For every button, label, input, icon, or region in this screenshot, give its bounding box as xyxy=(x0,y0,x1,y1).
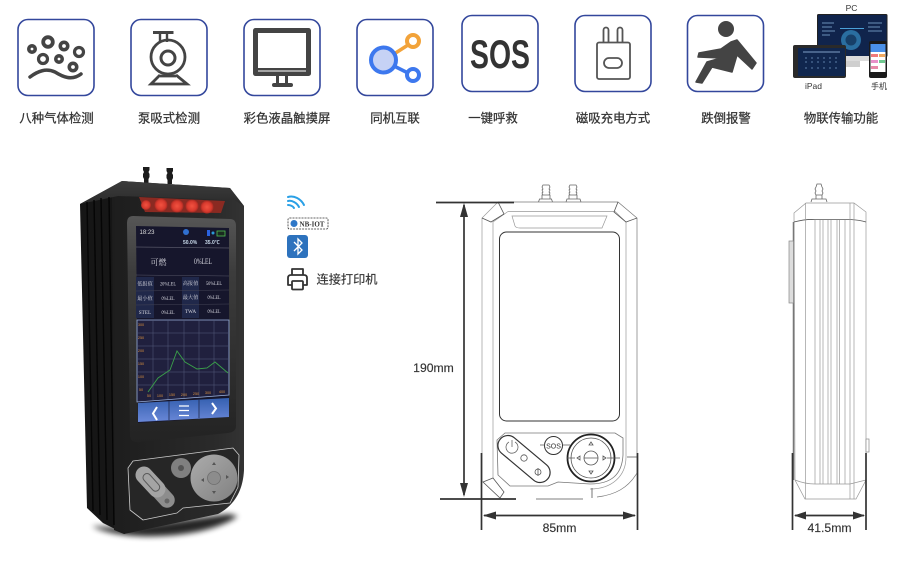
nozzles xyxy=(538,185,581,202)
parameter table xyxy=(136,277,229,318)
height dimension: 190mm xyxy=(413,361,454,375)
label: 磁吸充电方式 xyxy=(576,110,650,126)
depth dimension xyxy=(792,453,866,535)
side view drawing xyxy=(789,184,869,499)
label: 跌倒报警 xyxy=(701,110,751,126)
outline xyxy=(794,203,866,499)
direction pad xyxy=(568,434,614,482)
line chart: 50 xyxy=(139,388,143,392)
parameter table: 0%LEL xyxy=(208,295,220,301)
parameter table: 50%LEL xyxy=(206,281,222,287)
screen content: 35.0℃ xyxy=(205,240,220,246)
gas nozzles xyxy=(143,167,173,184)
red LED bar xyxy=(139,197,225,214)
label: 泵吸式检测 xyxy=(138,110,200,126)
parameter table: TWA xyxy=(185,309,196,315)
connectivity list xyxy=(287,196,377,290)
ribs xyxy=(806,203,854,499)
width dimension: 85mm xyxy=(543,521,576,535)
feature: fall alarm xyxy=(688,16,764,126)
line chart xyxy=(137,320,229,402)
printer label: 连接打印机 xyxy=(317,272,377,286)
icon: SOS: SOS xyxy=(470,33,530,77)
line chart: 100 xyxy=(138,375,144,379)
label: 物联传输功能 xyxy=(804,110,878,126)
height dimension xyxy=(413,202,516,499)
ground shadow xyxy=(92,514,238,536)
control panel xyxy=(128,448,239,520)
parameter table: 最小值 xyxy=(137,294,154,302)
front view drawing xyxy=(482,185,637,499)
depth dimension: 41.5mm xyxy=(807,521,852,535)
SOS button xyxy=(171,458,191,478)
icon: PC iPad phone: 手机 xyxy=(871,81,887,91)
parameter table: STEL xyxy=(139,310,151,316)
feature: colour touch screen xyxy=(244,20,330,126)
label: 八种气体检测 xyxy=(19,110,94,126)
parameter table: 0%LEL xyxy=(208,309,220,315)
icon: share nodes xyxy=(371,35,419,81)
label: 彩色液晶触摸屏 xyxy=(244,110,330,126)
LED window xyxy=(512,216,607,228)
parameter table: 最大值 xyxy=(183,293,199,301)
SOS key xyxy=(544,436,562,454)
status bar: 18:23 xyxy=(139,230,155,236)
ribbed side xyxy=(80,181,126,534)
feature: magnetic charging xyxy=(575,16,651,126)
line chart: 200 xyxy=(181,393,187,397)
top chamfer xyxy=(80,181,244,206)
parameter table: 高报值 xyxy=(183,279,199,287)
line chart: 150 xyxy=(169,393,175,397)
icon: printer xyxy=(288,269,307,290)
icon: pump xyxy=(151,32,187,84)
line chart: 250 xyxy=(193,392,199,396)
screen bezel xyxy=(127,216,236,442)
line chart: 300 xyxy=(138,323,144,327)
device photo xyxy=(80,167,244,536)
line chart: 150 xyxy=(138,362,144,366)
screen content: 50.0% xyxy=(183,240,198,246)
front view drawing: SOS xyxy=(546,444,561,450)
icon: wifi xyxy=(288,196,304,208)
parameter table: 0%LEL xyxy=(162,296,174,302)
label: 一键呼救 xyxy=(468,110,518,126)
parameter table: 低报值 xyxy=(137,280,154,288)
left edge and side button xyxy=(792,222,794,480)
control panel outline xyxy=(497,433,623,486)
icon: monitor xyxy=(253,28,311,87)
direction pad xyxy=(190,454,238,502)
nozzle xyxy=(811,184,827,202)
icon: falling person xyxy=(696,21,756,83)
bottom details xyxy=(483,457,637,499)
icon: PC iPad phone xyxy=(793,3,887,91)
icon: PC iPad phone: PC xyxy=(846,3,857,13)
main reading: 可燃 xyxy=(150,257,167,267)
width dimension xyxy=(482,453,638,535)
label: 同机互联 xyxy=(370,112,420,126)
icon: NB-IoT badge: NB-IOT xyxy=(300,220,325,228)
power slider button xyxy=(145,476,167,500)
power slider xyxy=(494,431,554,487)
line chart: 250 xyxy=(138,336,144,340)
parameter table: 20%LEL xyxy=(160,282,176,288)
line chart: 100 xyxy=(157,394,163,398)
line chart: 300 xyxy=(205,391,211,395)
line chart: 400 xyxy=(219,390,225,394)
side ribs xyxy=(87,197,114,525)
feature: one-key SOS xyxy=(462,16,538,126)
screen content: 0%LEL xyxy=(194,257,212,266)
icon: PC iPad phone: iPad xyxy=(805,81,822,91)
line chart: 50 xyxy=(147,394,151,398)
feature: pump detection xyxy=(131,20,207,126)
nav buttons xyxy=(138,398,229,422)
icon: charger xyxy=(597,28,630,79)
line chart: 200 xyxy=(138,349,144,353)
icon: gas particles xyxy=(29,37,84,78)
feature: IoT transmission xyxy=(793,3,887,126)
parameter table: 0%LEL xyxy=(162,310,174,316)
feature: peer interconnect xyxy=(357,20,433,126)
icon: bluetooth xyxy=(287,235,308,258)
front housing xyxy=(112,181,244,534)
screen outline xyxy=(500,232,620,421)
screen content xyxy=(136,229,229,422)
body outline xyxy=(498,202,637,497)
feature: eight gas detection xyxy=(18,20,94,126)
